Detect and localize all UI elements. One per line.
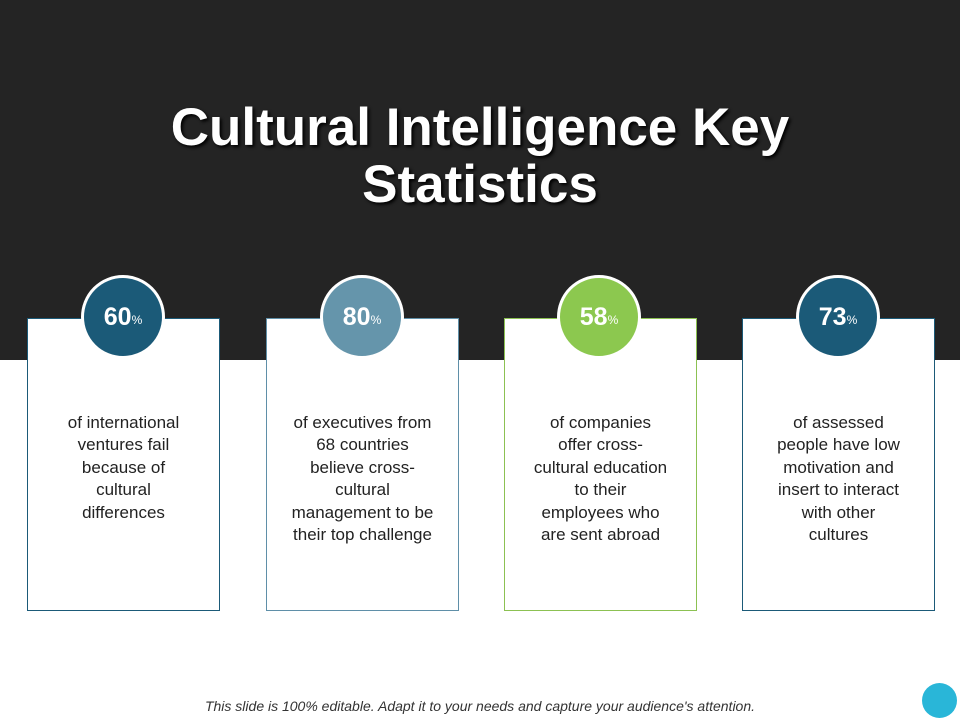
card 1: of international	[68, 413, 179, 432]
card 1	[27, 318, 220, 611]
title: Cultural Intelligence Key	[171, 98, 789, 157]
circle 60%	[81, 275, 165, 359]
circle 80%: %	[371, 313, 381, 327]
card 4: motivation and	[783, 458, 894, 477]
card 4: insert to interact	[778, 480, 899, 499]
circle 80%: 80	[343, 302, 371, 330]
card 1: ventures fail	[78, 435, 169, 454]
circle 80%	[320, 275, 404, 359]
card 2: 68 countries	[316, 435, 409, 454]
card 4: cultures	[809, 525, 868, 544]
circle 73%: 73	[819, 302, 847, 330]
card 3: are sent abroad	[541, 525, 660, 544]
card 2: of executives from	[294, 413, 431, 432]
card 3: employees who	[541, 503, 660, 522]
card 3: of companies	[550, 413, 651, 432]
card 3: offer cross-	[558, 435, 643, 454]
card 4	[742, 318, 935, 611]
card 3	[504, 318, 697, 611]
card 3: cultural education	[534, 458, 667, 477]
circle 60%: 60	[104, 302, 132, 330]
card 2	[266, 318, 459, 611]
card 2: cultural	[335, 480, 390, 499]
circle 58%: %	[608, 313, 618, 327]
card 1: cultural	[96, 480, 151, 499]
circle 73%: %	[847, 313, 857, 327]
circle 58%: 58	[580, 302, 608, 330]
footer: This slide is 100% editable. Adapt it to your needs and capture your audience's attention.	[205, 698, 755, 714]
icon: blue dot	[922, 683, 957, 718]
card 2: their top challenge	[293, 525, 432, 544]
card 2: management to be	[292, 503, 433, 522]
circle 73%	[796, 275, 880, 359]
card 4: with other	[802, 503, 875, 522]
card 4: people have low	[777, 435, 900, 454]
circle 58%	[557, 275, 641, 359]
title: Statistics	[362, 155, 598, 214]
title	[171, 98, 792, 214]
card 1: because of	[82, 458, 165, 477]
card 1: differences	[82, 503, 165, 522]
card 3: to their	[574, 480, 626, 499]
circle 60%: %	[132, 313, 142, 327]
card 4: of assessed	[793, 413, 884, 432]
card 2: believe cross-	[310, 458, 415, 477]
